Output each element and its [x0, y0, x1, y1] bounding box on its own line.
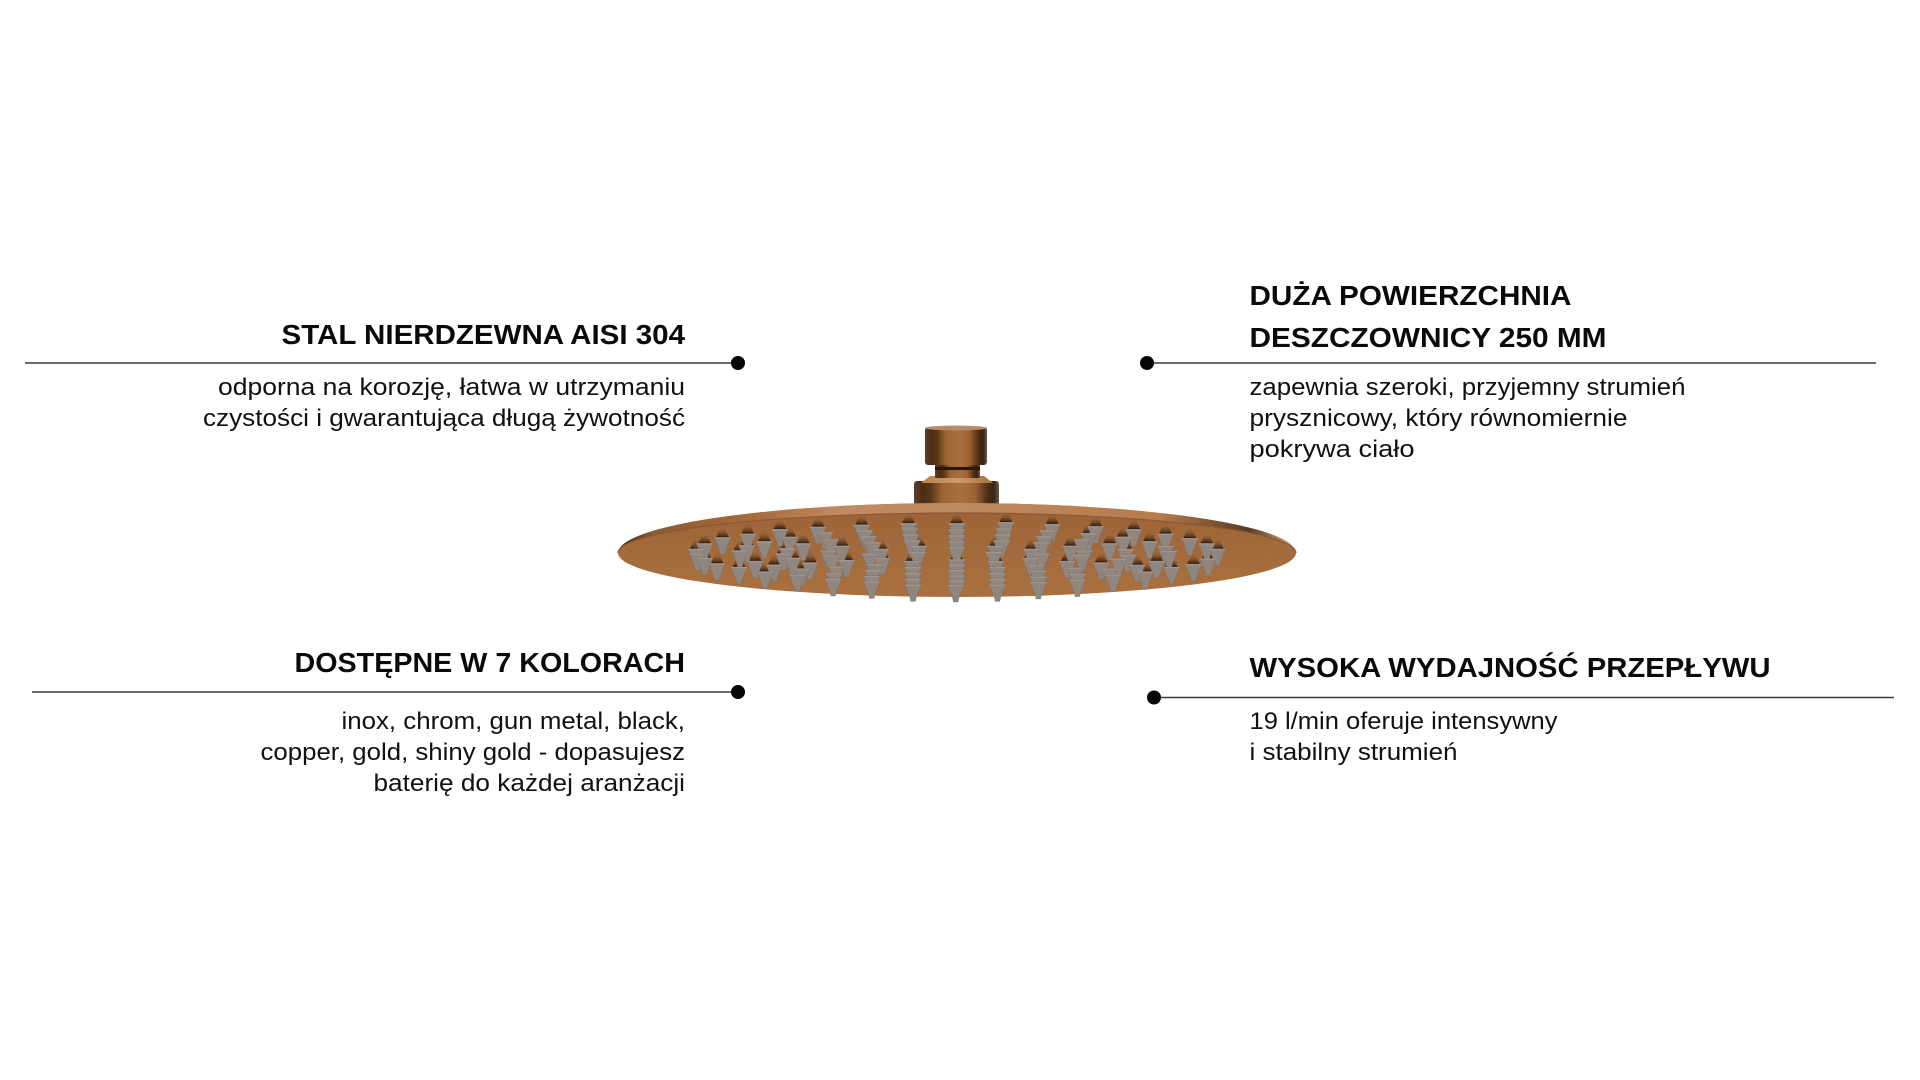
- heading: stainless steel: STAL NIERDZEWNA AISI 304: [282, 319, 685, 350]
- leader line with dot: [32, 685, 745, 699]
- body text: stainless steel: odporna na korozję, łatwa w utrzymaniu: [218, 374, 685, 401]
- panel: seven colours callout: [32, 647, 745, 797]
- body text: large surface: [1250, 374, 1686, 463]
- body text: seven colours: copper, gold, shiny gold - dopasujesz: [260, 739, 685, 766]
- shower arm connector: [914, 426, 999, 507]
- leader line with dot: [1147, 690, 1894, 704]
- body text: large surface: zapewnia szeroki, przyjemny strumień: [1250, 374, 1686, 401]
- body text: seven colours: [260, 708, 685, 797]
- nozzles: [688, 511, 1226, 602]
- shower plate: [618, 503, 1296, 597]
- body text: large surface: prysznicowy, który równomiernie: [1250, 405, 1628, 432]
- heading: seven colours: DOSTĘPNE W 7 KOLORACH: [294, 647, 685, 678]
- heading: large surface: DUŻA POWIERZCHNIA: [1250, 280, 1572, 311]
- panel: large surface callout: [1140, 280, 1876, 463]
- body text: stainless steel: czystości i gwarantująca długą żywotność: [203, 405, 685, 432]
- panel: high flow callout: [1147, 652, 1894, 766]
- body text: stainless steel: [203, 374, 685, 432]
- body text: high flow: [1250, 708, 1558, 766]
- leader line with dot: [25, 356, 745, 370]
- panel: stainless steel callout: [25, 319, 745, 432]
- heading: high flow: WYSOKA WYDAJNOŚĆ PRZEPŁYWU: [1250, 652, 1770, 683]
- body text: high flow: i stabilny strumień: [1250, 739, 1458, 766]
- body text: seven colours: baterię do każdej aranżacji: [374, 770, 685, 797]
- heading: large surface: [1250, 280, 1606, 353]
- body text: seven colours: inox, chrom, gun metal, black,: [342, 708, 685, 735]
- body text: large surface: pokrywa ciało: [1250, 436, 1414, 463]
- leader line with dot: [1140, 356, 1876, 370]
- panel: shower head product image: [618, 426, 1296, 602]
- body text: high flow: 19 l/min oferuje intensywny: [1250, 708, 1558, 735]
- heading: large surface: DESZCZOWNICY 250 MM: [1250, 322, 1606, 353]
